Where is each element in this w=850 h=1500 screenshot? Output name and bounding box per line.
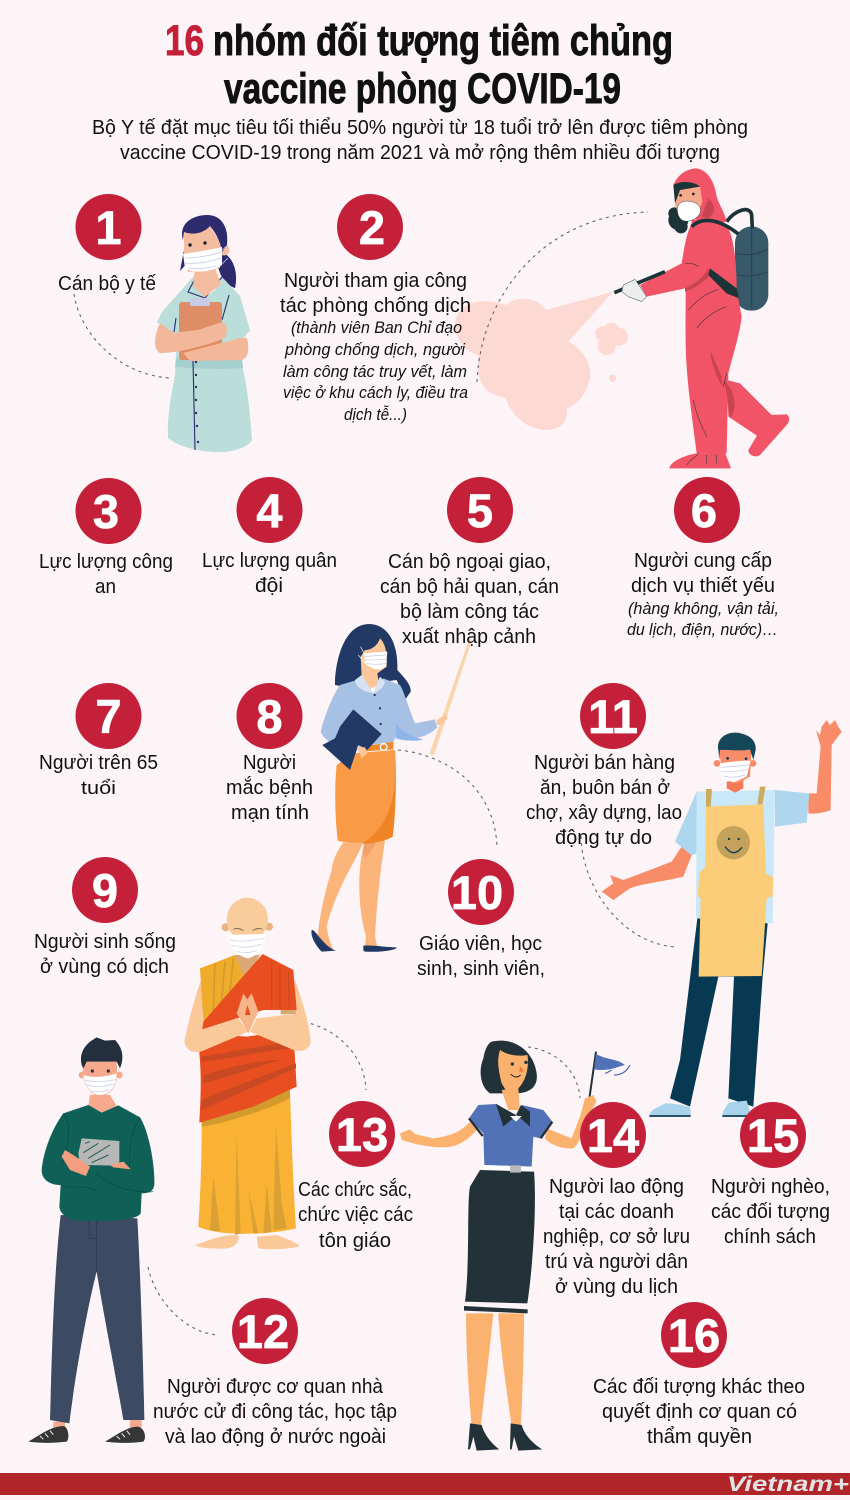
label 15 xyxy=(711,1176,830,1248)
label 5: bộ làm công tác xyxy=(400,601,539,623)
leader line: item 10 xyxy=(398,750,497,847)
label 12: Người được cơ quan nhà xyxy=(167,1376,384,1398)
item 10 xyxy=(417,859,545,980)
title: 16 xyxy=(165,17,204,65)
label 11 xyxy=(526,752,682,849)
badge 11: 11 xyxy=(588,690,638,743)
label 9 xyxy=(34,931,176,978)
label 8: mạn tính xyxy=(231,802,309,824)
item 9 xyxy=(34,857,176,978)
badge 11 xyxy=(580,683,646,749)
label 14: tại các doanh xyxy=(559,1201,674,1223)
badge 16: 16 xyxy=(668,1309,720,1362)
item 16 xyxy=(593,1302,805,1448)
badge 8: 8 xyxy=(256,690,283,743)
badge 14: 14 xyxy=(587,1109,639,1162)
label 15: Người nghèo, xyxy=(711,1176,830,1198)
title xyxy=(165,17,673,113)
label 2: Người tham gia công xyxy=(284,270,467,292)
label 6: Người cung cấp xyxy=(634,550,772,572)
label 2: việc ở khu cách ly, điều tra xyxy=(283,383,468,402)
badge 2: 2 xyxy=(359,201,385,254)
label 10: Giáo viên, học xyxy=(419,933,542,955)
badge 4: 4 xyxy=(256,484,283,537)
label 12 xyxy=(153,1376,397,1448)
badge 16 xyxy=(661,1302,727,1368)
badge 7: 7 xyxy=(95,690,122,743)
badge 15 xyxy=(740,1102,806,1168)
item 1 xyxy=(58,194,156,295)
label 5 xyxy=(380,551,559,648)
label 13: tôn giáo xyxy=(319,1230,391,1252)
disinfectant spray cloud xyxy=(455,292,628,430)
illustration: teacher with pointer xyxy=(311,624,472,952)
badge 13 xyxy=(329,1101,395,1167)
illustration: worker in red protective suit spraying xyxy=(614,168,789,468)
badge 1: 1 xyxy=(95,201,122,254)
leader line: item 14 xyxy=(528,1047,580,1098)
subtitle: Bộ Y tế đặt mục tiêu tối thiểu 50% người từ 18 tuổi trở lên được tiêm phòng xyxy=(92,117,748,139)
label 13: Các chức sắc, xyxy=(298,1178,412,1201)
label 16: thẩm quyền xyxy=(647,1426,752,1448)
label 16 xyxy=(593,1376,805,1448)
item 12 xyxy=(153,1298,397,1448)
label 3 xyxy=(39,551,173,598)
title: nhóm đối tượng tiêm chủng xyxy=(213,17,673,65)
illustration: vendor in apron waving xyxy=(602,720,842,1116)
leader line: item 12 xyxy=(148,1267,218,1335)
label 10 xyxy=(417,933,545,980)
badge 6 xyxy=(674,477,740,543)
label 8: Người xyxy=(243,752,296,774)
item 7 xyxy=(39,683,158,798)
item 3 xyxy=(39,478,173,598)
leader line: item 1 xyxy=(74,294,170,378)
badge 5: 5 xyxy=(467,484,493,537)
badge 8 xyxy=(236,683,302,749)
item 14 xyxy=(543,1102,690,1298)
label 4: đội xyxy=(255,575,283,597)
badge 6: 6 xyxy=(691,484,717,537)
item 5 xyxy=(380,477,559,648)
label 14: nghiệp, cơ sở lưu xyxy=(543,1226,690,1248)
label 5: cán bộ hải quan, cán xyxy=(380,576,559,598)
footer bar with Vietnam+ logo xyxy=(0,1473,850,1496)
label 2: làm công tác truy vết, làm xyxy=(283,362,467,381)
label 4: Lực lượng quân xyxy=(202,550,337,572)
label 6: (hàng không, vận tải, xyxy=(628,599,779,618)
badge 10: 10 xyxy=(451,866,503,919)
label 8: mắc bệnh xyxy=(226,776,313,799)
badge 14 xyxy=(580,1102,646,1168)
label 9: Người sinh sống xyxy=(34,931,176,953)
label 6 xyxy=(627,550,779,639)
label 2: phòng chống dịch, người xyxy=(284,340,466,359)
label 14: trú và người dân xyxy=(545,1251,688,1273)
label 12: nước cử đi công tác, học tập xyxy=(153,1401,397,1423)
label 2: (thành viên Ban Chỉ đạo xyxy=(291,318,462,337)
label 15: các đối tượng xyxy=(711,1201,830,1223)
badge 12: 12 xyxy=(237,1305,289,1358)
item 2 xyxy=(280,194,471,424)
label 8 xyxy=(226,752,313,824)
subtitle: vaccine COVID-19 trong năm 2021 và mở rộng thêm nhiều đối tượng xyxy=(120,142,720,164)
label 11: ăn, buôn bán ở xyxy=(540,777,670,799)
label 7: Người trên 65 xyxy=(39,752,158,774)
label 14 xyxy=(543,1176,690,1298)
label 5: xuất nhập cảnh xyxy=(402,626,536,648)
item 4 xyxy=(202,477,337,597)
badge 12 xyxy=(232,1298,298,1364)
leader line: item 13 xyxy=(297,1021,366,1090)
badge 13: 13 xyxy=(336,1108,388,1161)
label 14: ở vùng du lịch xyxy=(555,1276,678,1298)
badge 9 xyxy=(72,857,138,923)
label 4 xyxy=(202,550,337,597)
label 7 xyxy=(39,752,158,798)
illustration: man in green sweater with tablet xyxy=(28,1037,154,1443)
leader line: item 2 xyxy=(477,212,648,382)
illustration: nurse xyxy=(155,215,252,452)
label 2: tác phòng chống dịch xyxy=(280,295,471,317)
label 11: động tự do xyxy=(555,827,652,849)
item 6 xyxy=(627,477,779,639)
label 2: dịch tễ...) xyxy=(344,405,407,424)
item 15 xyxy=(711,1102,830,1248)
label 13 xyxy=(298,1178,413,1252)
label 11: chợ, xây dựng, lao xyxy=(526,802,682,824)
label 14: Người lao động xyxy=(549,1176,684,1198)
badge 15: 15 xyxy=(747,1109,799,1162)
label 10: sinh, sinh viên, xyxy=(417,958,545,980)
label 3: an xyxy=(95,576,116,598)
item 11 xyxy=(526,683,682,849)
title: vaccine phòng COVID-19 xyxy=(224,65,621,113)
label 12: và lao động ở nước ngoài xyxy=(165,1426,386,1448)
label 5: Cán bộ ngoại giao, xyxy=(388,551,551,573)
badge 9: 9 xyxy=(92,864,118,917)
label 11: Người bán hàng xyxy=(534,752,675,774)
illustration: monk praying xyxy=(184,898,311,1249)
subtitle xyxy=(92,117,748,164)
label 1: Cán bộ y tế xyxy=(58,273,156,295)
label 9: ở vùng có dịch xyxy=(40,956,169,978)
badge 3: 3 xyxy=(93,485,119,538)
leader line: item 11 xyxy=(581,836,677,947)
label 6: du lịch, điện, nước)… xyxy=(627,620,778,639)
label 2 xyxy=(280,270,471,424)
label 16: quyết định cơ quan có xyxy=(602,1401,797,1423)
footer bar with Vietnam+ logo: Vietnam+ xyxy=(727,1473,849,1496)
label 16: Các đối tượng khác theo xyxy=(593,1376,805,1398)
item 8 xyxy=(226,683,313,824)
label 3: Lực lượng công xyxy=(39,551,173,573)
label 15: chính sách xyxy=(724,1226,816,1248)
label 6: dịch vụ thiết yếu xyxy=(631,575,775,597)
illustration: woman in blue top with flag xyxy=(400,1041,630,1451)
label 7: tuổi xyxy=(81,778,116,798)
label 13: chức việc các xyxy=(298,1204,413,1226)
item 13 xyxy=(298,1101,413,1252)
badge 2 xyxy=(337,194,403,260)
badge 5 xyxy=(447,477,513,543)
